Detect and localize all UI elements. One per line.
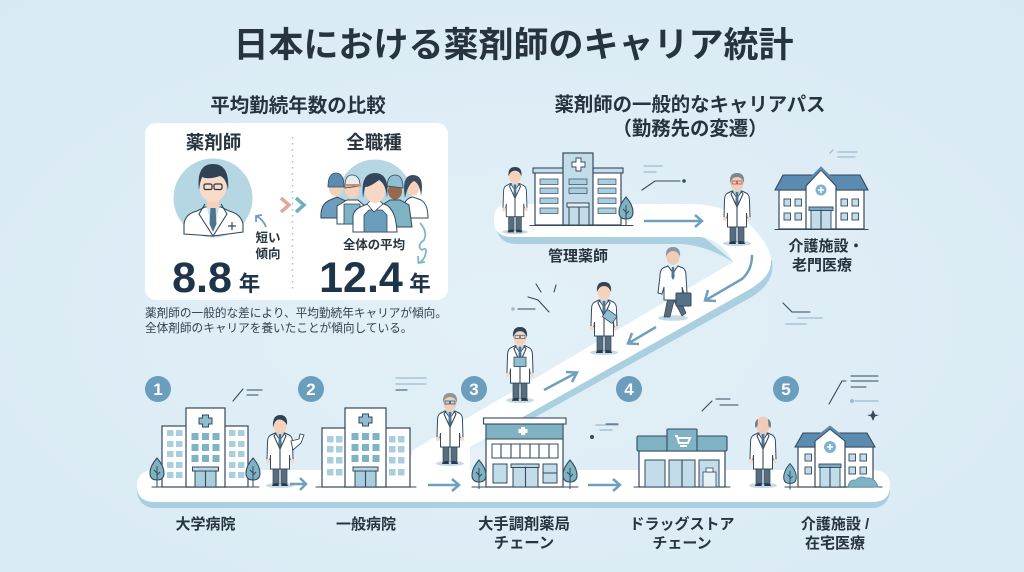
pharmacist column heading: 薬剤師 <box>186 132 241 153</box>
panel: tenure comparison <box>145 123 448 302</box>
label: care facility and home care <box>801 515 870 552</box>
career path road: lower horizontal band <box>137 445 890 508</box>
label: large dispensing pharmacy chain: チェーン <box>494 535 554 552</box>
badge: step 1 <box>145 376 171 402</box>
label: short tendency <box>255 230 281 261</box>
label: drugstore chain <box>629 515 735 552</box>
label: management pharmacist: 管理薬師 <box>548 247 608 265</box>
badge: step 3 <box>461 376 487 402</box>
person: elderly pharmacist <box>749 416 777 488</box>
label: care facility and medical <box>788 237 864 274</box>
title: 日本における薬剤師のキャリア統計 <box>233 26 794 65</box>
label: drugstore chain: チェーン <box>652 535 712 552</box>
building: dispensing pharmacy chain <box>472 418 578 489</box>
label: general hospital: 一般病院 <box>336 515 396 533</box>
value: pharmacist 8.8 years: 8.8 <box>172 254 232 302</box>
badge: step 2: 2 <box>306 380 316 399</box>
arrow: curved route down <box>705 255 752 301</box>
label: overall average: 全体の平均 <box>343 237 405 252</box>
building: university hospital <box>150 408 260 487</box>
person: pharmacist with folder <box>590 282 618 355</box>
building: care facility and home care <box>784 427 882 490</box>
person: senior pharmacist top <box>723 173 751 246</box>
person: walking pharmacist with briefcase <box>658 247 691 321</box>
arrow: top route right <box>644 215 702 227</box>
icon: looping average arrow <box>418 223 426 263</box>
value: all occupations 12.4 years: 12.4 <box>319 254 403 302</box>
label: large dispensing pharmacy chain <box>478 515 570 552</box>
label: care facility and home care: 介護施設 / <box>801 515 870 533</box>
label: drugstore chain: ドラッグストア <box>629 515 735 533</box>
building: general hospital <box>316 408 416 487</box>
label: care facility and home care: 在宅医療 <box>805 534 865 552</box>
label: care facility and medical: 介護施設・ <box>788 237 864 255</box>
building: drugstore chain <box>634 429 730 487</box>
arrow: step 2 to 3 <box>428 479 459 491</box>
person: senior pharmacist step 3 <box>436 393 464 466</box>
badge: step 3: 3 <box>469 380 479 399</box>
heading: typical career path: （勤務先の変遷） <box>612 118 768 140</box>
icon: comparison chevrons <box>281 198 304 212</box>
label: large dispensing pharmacy chain: 大手調剤薬局 <box>478 515 570 533</box>
icon: pharmacist portrait <box>174 158 252 238</box>
label: short tendency: 短い <box>255 230 281 245</box>
arrow: path up-right <box>544 372 577 390</box>
label: university hospital: 大学病院 <box>175 515 236 533</box>
arrow: step 1 to 2 <box>290 478 306 490</box>
text block: comparison note <box>145 306 447 335</box>
icon: short-tendency arrow <box>256 215 266 227</box>
person: pharmacist gesturing <box>266 415 304 488</box>
label: care facility and medical: 老門医療 <box>792 257 852 274</box>
heading: typical career path <box>554 94 826 140</box>
badge: step 2 <box>298 376 324 402</box>
text block: comparison note: 全体剤師のキャリアを養いたことが傾向している。 <box>145 321 412 335</box>
building: care facility top <box>775 168 868 230</box>
heading: typical career path: 薬剤師の一般的なキャリアパス <box>554 94 826 116</box>
label: short tendency: 傾向 <box>255 246 281 261</box>
icon: group of workers <box>321 159 428 232</box>
heading: average tenure comparison: 平均勤続年数の比較 <box>210 94 386 117</box>
badge: step 4 <box>616 376 642 402</box>
person: management pharmacist <box>502 167 528 234</box>
value: pharmacist 8.8 years: 年 <box>239 272 260 296</box>
badge: step 1: 1 <box>153 380 163 399</box>
arrow: step 3 to 4 <box>588 479 620 491</box>
value: pharmacist 8.8 years <box>172 254 260 302</box>
all occupations column heading: 全職種 <box>346 132 402 153</box>
badge: step 5 <box>773 376 799 402</box>
value: all occupations 12.4 years: 年 <box>409 272 431 296</box>
building: management pharmacist hospital <box>530 153 633 226</box>
person: pharmacist with clipboard <box>506 327 534 403</box>
text block: comparison note: 薬剤師の一般的な差により、平均勤続年キャリアが傾向。 <box>145 306 447 320</box>
career path road: upper winding route <box>406 204 772 475</box>
arrow: path down-left 1 <box>628 327 656 344</box>
badge: step 5: 5 <box>781 380 791 399</box>
badge: step 4: 4 <box>624 380 634 399</box>
